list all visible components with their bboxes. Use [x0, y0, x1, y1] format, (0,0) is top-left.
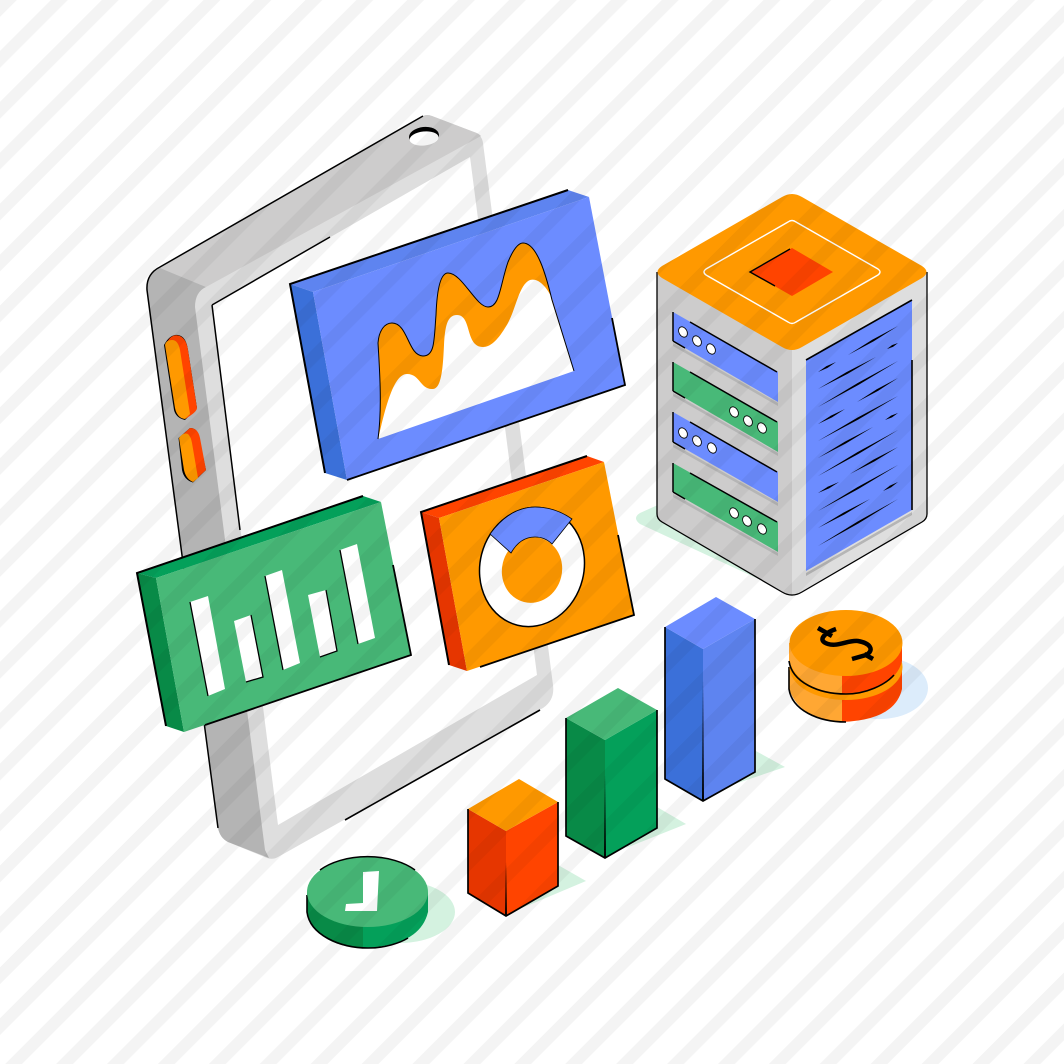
- camera hole: [408, 125, 440, 147]
- server right face: [792, 272, 927, 596]
- tablet device frame: [147, 115, 553, 859]
- bar: blue: [665, 597, 755, 801]
- bar: red: [468, 779, 558, 916]
- side button small: [178, 428, 206, 482]
- shadow: dollar coins: [832, 657, 928, 719]
- green check coin: [307, 857, 428, 948]
- donut blue wedge: [490, 507, 572, 553]
- top inner outline: [704, 220, 880, 324]
- area chart white fill: [378, 243, 574, 439]
- shadow: green coin: [345, 881, 455, 943]
- shadow: server: [636, 504, 765, 582]
- panel: blue area chart: [290, 190, 625, 480]
- side button large: [164, 335, 197, 420]
- bars: [190, 544, 375, 696]
- server slot: green 2: [673, 463, 778, 556]
- server slot: green 1: [673, 362, 778, 456]
- panel: green bar chart: [137, 496, 411, 732]
- shadow: green bar: [626, 807, 686, 848]
- donut ring: [467, 496, 597, 638]
- shadow: red bar: [522, 865, 586, 908]
- server cabinet: [657, 194, 927, 596]
- upper coin: [789, 610, 902, 694]
- bar: green: [566, 688, 657, 858]
- top red square: [750, 248, 833, 296]
- server side panel with vent lines: [806, 300, 912, 576]
- lower coin: [789, 634, 902, 722]
- icon: dollar: [818, 628, 873, 659]
- server left face: [657, 272, 792, 596]
- coin stack with dollar: [789, 610, 902, 722]
- server slot: blue 1: [673, 312, 778, 406]
- check mark: [345, 871, 379, 911]
- area chart orange ribbon: [378, 243, 574, 439]
- donut centre: [495, 531, 569, 609]
- server top: [658, 194, 926, 350]
- panel: orange donut chart: [421, 456, 634, 671]
- area chart top line: [378, 243, 574, 439]
- shadow: blue bar: [717, 750, 785, 790]
- server slot: blue 2: [673, 412, 778, 506]
